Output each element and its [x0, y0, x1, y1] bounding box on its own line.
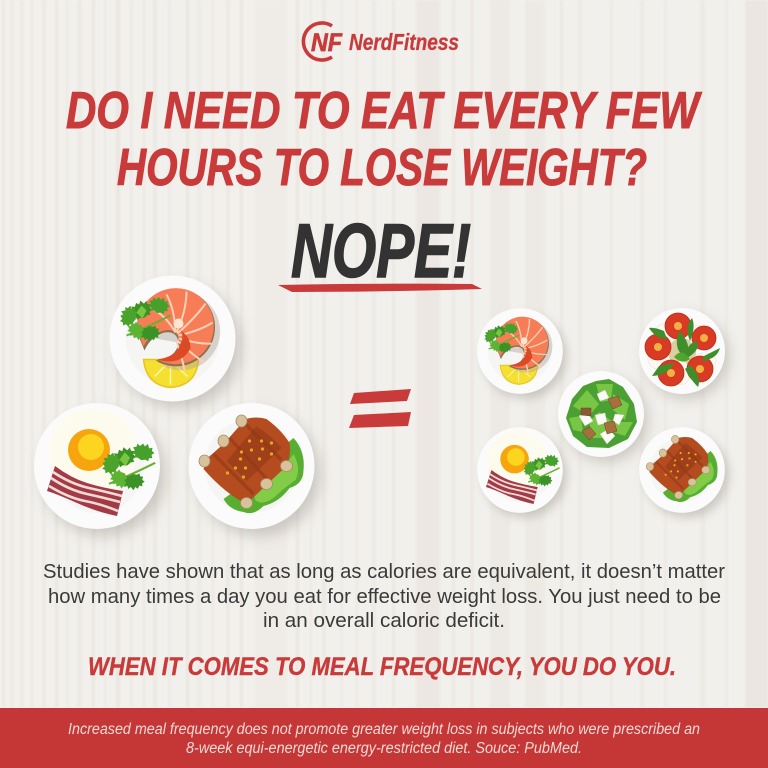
small plate: caprese [639, 308, 729, 399]
logo mark: NF [311, 29, 343, 57]
small plate: salad [558, 371, 648, 462]
body paragraph: how many times a day you eat for effective weight loss. You just need to be [48, 585, 721, 608]
body paragraph: Studies have shown that as long as calories are equivalent, it doesn’t matter [43, 560, 725, 583]
footer citation [68, 721, 700, 757]
logo [303, 23, 459, 60]
logo mark [303, 23, 343, 60]
footer citation: 8-week equi-energetic energy-restricted diet. Souce: PubMed. [186, 740, 582, 757]
footer citation: Increased meal frequency does not promote greater weight loss in subjects who were prescribed an [68, 721, 700, 738]
equals sign [349, 389, 411, 428]
body paragraph: in an overall caloric deficit. [263, 609, 505, 632]
footer band [0, 708, 768, 768]
body paragraph [43, 560, 725, 632]
logo wordmark: NerdFitness [349, 29, 459, 55]
plate: egg and bacon [34, 403, 166, 536]
plate: ribs [188, 403, 320, 536]
title [66, 82, 702, 197]
small plate: salmon [477, 308, 567, 399]
three large meals [34, 276, 320, 536]
slogan: WHEN IT COMES TO MEAL FREQUENCY, YOU DO YOU. [88, 653, 676, 681]
plate: salmon [110, 276, 242, 408]
heading underline [278, 284, 482, 292]
five small meals [477, 308, 729, 518]
small plate: ribs [639, 427, 729, 518]
small plate: egg and bacon [477, 427, 567, 518]
heading: nope: NOPE! [291, 209, 471, 294]
